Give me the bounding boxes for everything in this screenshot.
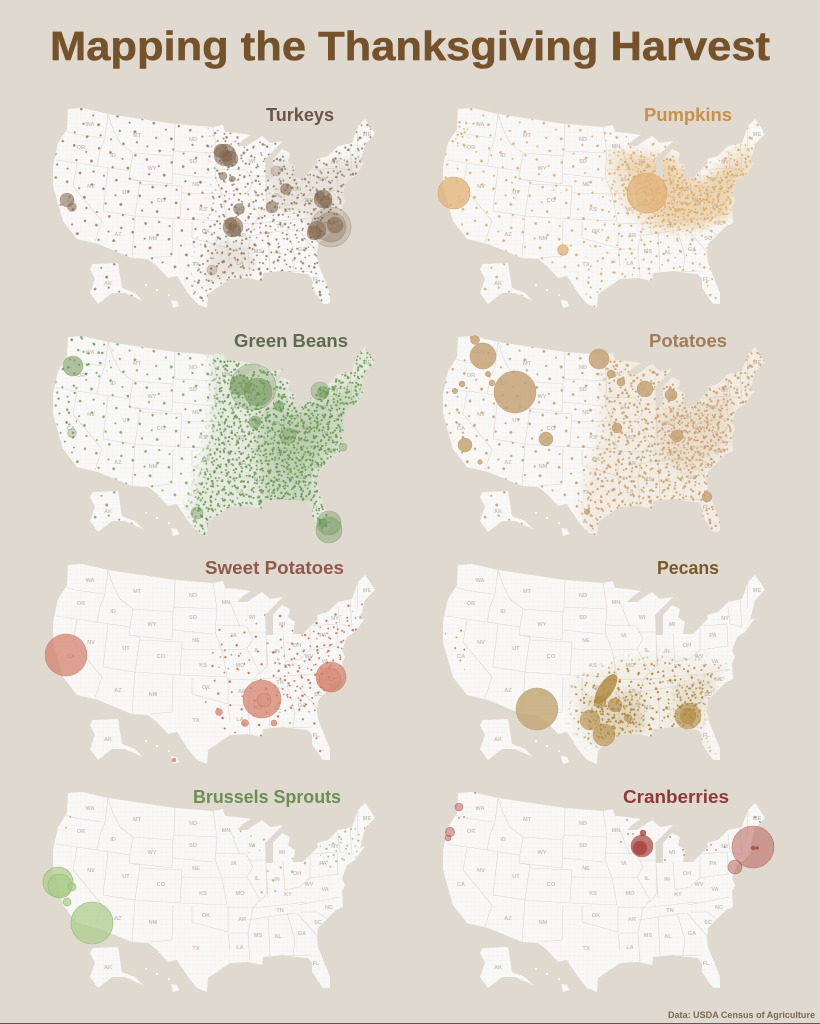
- map graphic: Turkeys: [53, 108, 375, 308]
- base map: [430, 552, 775, 777]
- panel: Green Beans: [53, 334, 375, 544]
- large producer circles: green beans: [63, 356, 347, 543]
- panel: Brussels Sprouts: [42, 790, 375, 992]
- panel: Turkeys: [53, 108, 375, 308]
- map graphic: Brussels Sprouts: [42, 792, 375, 992]
- large producer circles: cranberries: [445, 803, 774, 874]
- large producer circles: potatoes: [452, 336, 712, 515]
- panel: Pumpkins: [438, 108, 765, 308]
- base map: [430, 96, 775, 321]
- county dots: green beans: [54, 336, 375, 536]
- base map: [40, 552, 385, 777]
- heading: Brussels Sprouts: Brussels Sprouts: [193, 787, 341, 807]
- source note: Data: USDA Census of Agriculture: [668, 1010, 815, 1021]
- county dots: pecans: [445, 629, 728, 755]
- panel: Cranberries: [430, 780, 775, 1005]
- county dots: turkeys: [54, 108, 372, 304]
- county dots: sweet potatoes: [205, 603, 363, 753]
- panel: Sweet Potatoes: [44, 561, 375, 764]
- map graphic: Sweet Potatoes: [44, 564, 375, 764]
- map graphic: Pumpkins: [438, 108, 765, 308]
- panel: Pecans: [443, 561, 765, 764]
- heading: Sweet Potatoes: Sweet Potatoes: [205, 558, 344, 578]
- base map: [430, 780, 775, 1005]
- base map: [430, 324, 775, 549]
- county dots: brussels sprouts: [65, 816, 365, 894]
- heading: Green Beans: Green Beans: [234, 331, 348, 351]
- title: Mapping the Thanksgiving Harvest: [50, 23, 770, 69]
- base map: [40, 780, 385, 1005]
- small cranberry dots: [458, 792, 761, 861]
- county dots: potatoes: [444, 336, 765, 536]
- large producer circles: pecans: [516, 671, 701, 746]
- heading: Cranberries: Cranberries: [623, 787, 729, 807]
- large producer circles: pumpkins: [438, 173, 667, 255]
- large producer circles: brussels sprouts: [43, 867, 113, 944]
- heading: Turkeys: Turkeys: [266, 105, 334, 125]
- panel: Potatoes: [443, 334, 765, 536]
- county dots: pumpkins: [444, 108, 764, 308]
- heading: Potatoes: Potatoes: [649, 331, 727, 351]
- map graphic: Green Beans: [53, 336, 375, 544]
- base map: [40, 96, 385, 321]
- map graphic: Potatoes: [443, 335, 765, 536]
- heading: Pecans: Pecans: [657, 558, 719, 578]
- base map: [40, 324, 385, 549]
- large producer circles: turkeys: [60, 144, 351, 275]
- map graphic: Cranberries: [430, 780, 775, 1005]
- large producer circles: sweet potatoes: [45, 634, 346, 762]
- heading: Pumpkins: Pumpkins: [644, 105, 732, 125]
- map graphic: Pecans: [443, 564, 765, 764]
